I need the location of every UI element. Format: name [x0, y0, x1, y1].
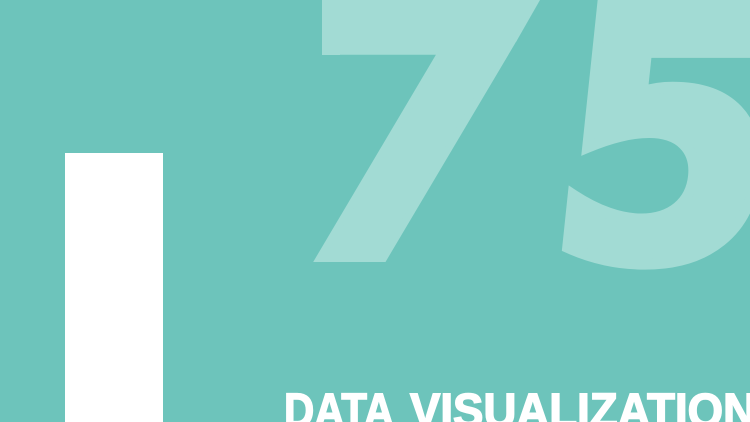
- white bar: [65, 153, 163, 422]
- big number 75: [256, 0, 750, 342]
